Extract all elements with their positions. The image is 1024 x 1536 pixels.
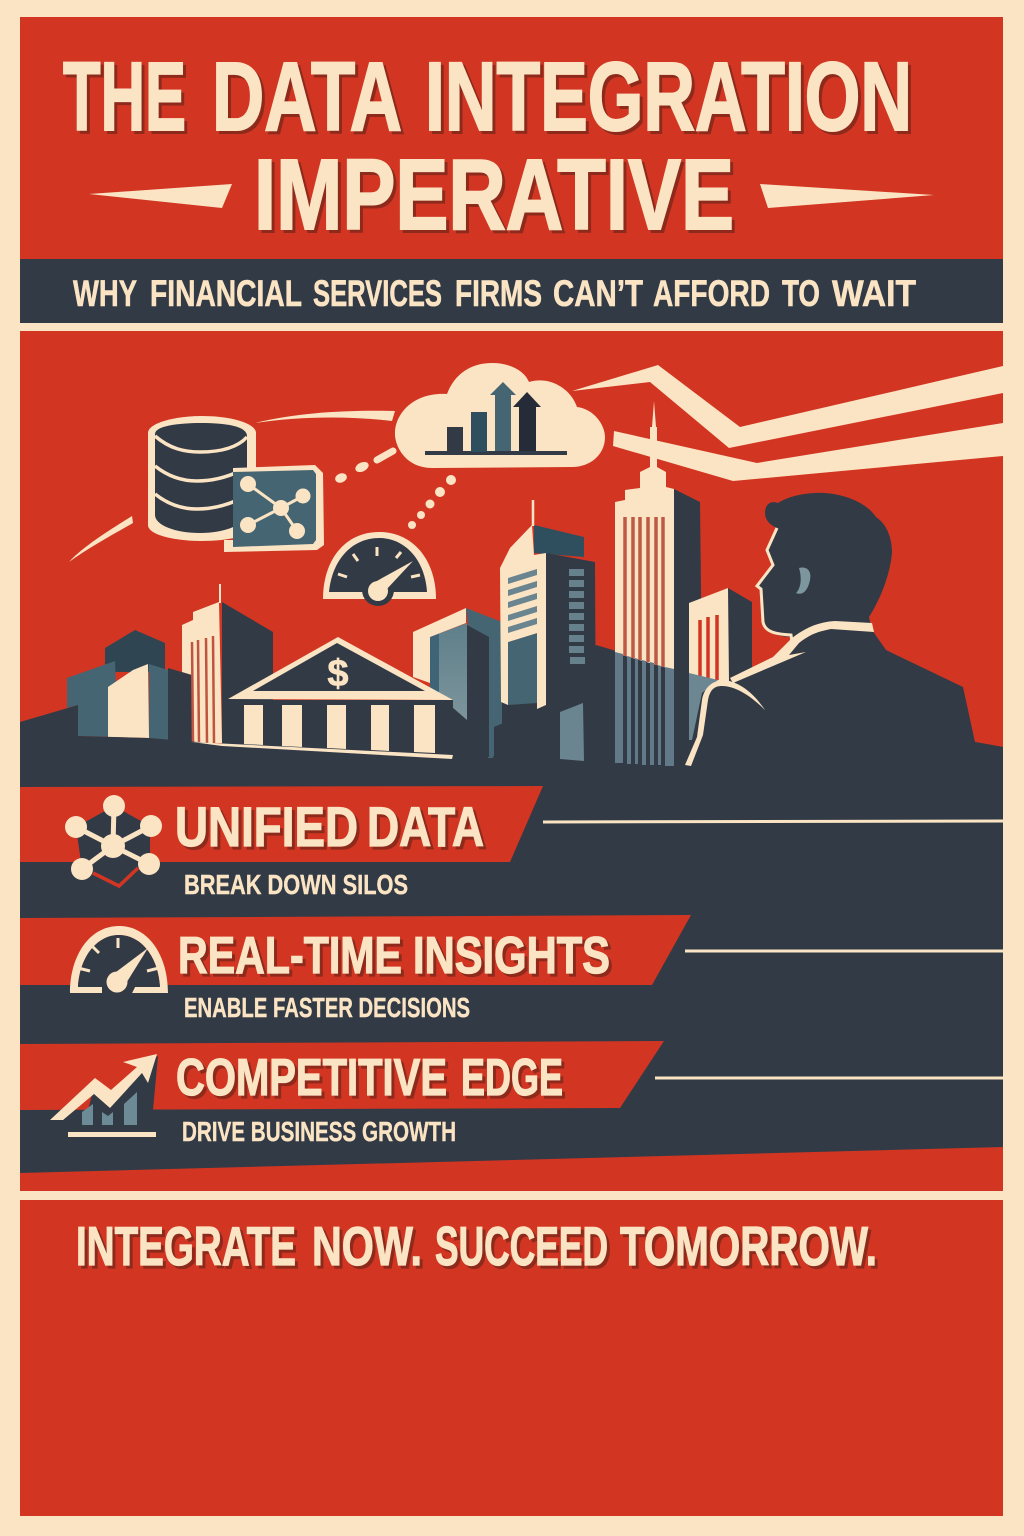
subtitle: FIRMS bbox=[455, 273, 542, 314]
shaded lower facade bbox=[615, 652, 674, 766]
striped tower bbox=[182, 584, 273, 746]
heading: UNIFIED bbox=[175, 795, 358, 858]
subtitle: CAN’T bbox=[553, 273, 643, 314]
low-rise sides bbox=[149, 664, 192, 743]
icon: bank with dollar sign bbox=[192, 637, 453, 759]
icon: gauge bbox=[323, 532, 436, 606]
ground bbox=[20, 705, 1003, 800]
subtitle bbox=[73, 273, 916, 314]
description: DRIVE BUSINESS GROWTH bbox=[182, 1116, 456, 1147]
head bbox=[757, 493, 892, 658]
subtitle: AFFORD bbox=[653, 273, 770, 314]
zigzag trend bands bbox=[572, 365, 1003, 481]
subtitle: TO bbox=[782, 273, 820, 314]
suit bbox=[691, 630, 1003, 790]
dotted connector: tile to cloud bbox=[334, 451, 393, 484]
back rooftop bbox=[105, 630, 165, 672]
left title flourish bbox=[89, 184, 232, 208]
closing tagline: SUCCEED bbox=[435, 1215, 608, 1277]
cream low-rise bbox=[108, 664, 149, 738]
midground mass bbox=[494, 645, 720, 780]
feature: real-time insights bbox=[20, 915, 1003, 1023]
tower with windows bbox=[500, 500, 596, 761]
illustration: data flows over financial skyline bbox=[20, 363, 1003, 800]
title line 1: THE bbox=[63, 42, 186, 151]
heading: REAL-TIME bbox=[178, 927, 402, 985]
icon: speed gauge bbox=[70, 926, 168, 993]
silhouette: business person bbox=[685, 493, 1003, 790]
closing tagline: INTEGRATE bbox=[76, 1215, 296, 1277]
title line 1: DATA bbox=[212, 42, 402, 151]
right title flourish bbox=[760, 184, 934, 208]
shaded lower wedge bbox=[689, 673, 718, 740]
icon: database bbox=[148, 416, 256, 541]
heading: DATA bbox=[367, 795, 484, 858]
closing tagline: TOMORROW. bbox=[620, 1215, 877, 1277]
feature: unified data bbox=[20, 786, 1003, 900]
red ribbon bbox=[20, 1041, 664, 1110]
mid tower bbox=[413, 608, 502, 758]
red ribbon bbox=[20, 915, 691, 985]
title line 1 bbox=[63, 42, 912, 151]
navy fill behind mid buildings bbox=[440, 692, 570, 772]
teal low-rise bbox=[67, 661, 118, 737]
description: ENABLE FASTER DECISIONS bbox=[184, 992, 470, 1023]
title line 2: IMPERATIVE bbox=[254, 139, 734, 251]
swoosh accents bbox=[69, 411, 395, 562]
collar bbox=[730, 621, 874, 683]
small tower by shoulder bbox=[689, 588, 752, 740]
red ribbon bbox=[20, 786, 543, 862]
description: BREAK DOWN SILOS bbox=[184, 869, 408, 900]
icon: growth arrow bbox=[50, 1054, 158, 1137]
heading bbox=[178, 927, 610, 985]
heading: COMPETITIVE bbox=[176, 1049, 447, 1107]
title bbox=[63, 42, 934, 251]
icon: cloud with chart bbox=[395, 363, 605, 468]
icon: network tile bbox=[224, 465, 324, 552]
navy feature block bbox=[20, 780, 1003, 1173]
subtitle: FINANCIAL bbox=[150, 273, 302, 314]
closing tagline bbox=[76, 1215, 877, 1277]
shoulder highlight bbox=[685, 680, 765, 766]
closing tagline: NOW. bbox=[312, 1215, 422, 1277]
subtitle band bbox=[20, 259, 1003, 323]
skyline bbox=[67, 401, 752, 780]
icon: data hub bbox=[65, 795, 162, 886]
ear highlight bbox=[796, 568, 810, 594]
heading: INSIGHTS bbox=[413, 927, 610, 985]
tall skyscraper bbox=[615, 401, 702, 766]
dotted connector: gauge to cloud bbox=[408, 475, 456, 529]
dollar sign: $ bbox=[327, 653, 349, 695]
subtitle: WHY bbox=[73, 273, 137, 314]
heading: EDGE bbox=[461, 1049, 563, 1107]
subtitle: WAIT bbox=[832, 273, 916, 314]
subtitle: SERVICES bbox=[313, 273, 442, 314]
face outline bbox=[757, 528, 792, 642]
feature: competitive edge bbox=[20, 1041, 1003, 1147]
